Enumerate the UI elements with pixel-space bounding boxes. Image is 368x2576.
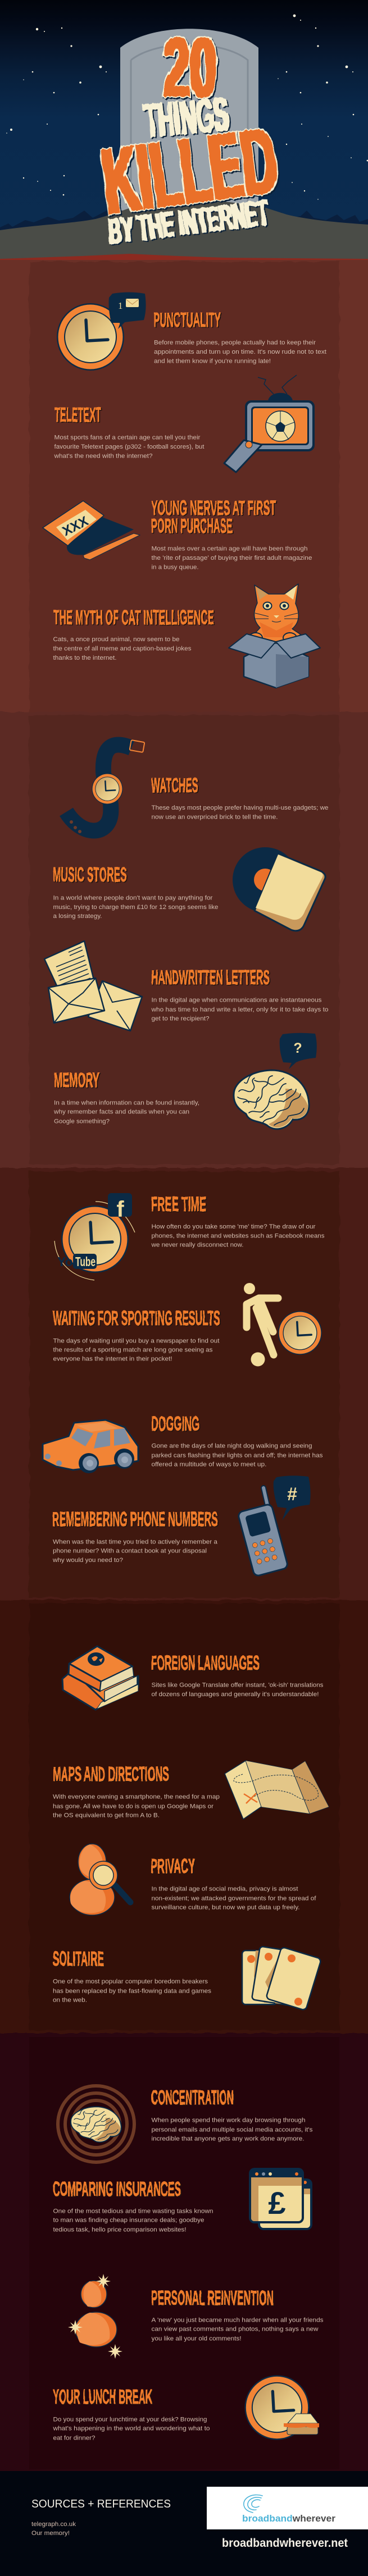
text block: why would you need to? (52, 1557, 123, 1564)
text block (152, 805, 328, 821)
icon: brain in concentric rings (58, 2086, 134, 2162)
text block: In the digital age of social media, privacy is almost (152, 1885, 298, 1892)
text block: Most males over a certain age will have been through (152, 546, 308, 552)
text block: now use an overpriced brick to tell the time. (152, 814, 278, 821)
text block: the centre of all meme and caption-based jokes (53, 646, 192, 652)
text block: has gone. All we have to do is open up Google Maps or (53, 1803, 213, 1810)
text block (152, 2117, 313, 2143)
stars (6, 15, 368, 200)
text block: sources: telegraph.co.uk (31, 2521, 76, 2528)
icon: folded map (225, 1761, 329, 1819)
panel: maps and directions (53, 1761, 329, 1819)
text block (53, 435, 205, 459)
icon: footballer and clock (244, 1283, 322, 1367)
text block: A 'new' you just became much harder when all your friends (152, 2317, 324, 2323)
panel: handwritten letters (44, 941, 328, 1031)
logo panel (207, 2487, 368, 2529)
section 5 background (0, 2033, 368, 2477)
text block: Sites like Google Translate offer instant, 'ok-ish' translations (152, 1682, 324, 1689)
heading (151, 496, 276, 537)
footer background (0, 2471, 368, 2576)
text block: the OS equivalent to get from A to B. (53, 1812, 160, 1819)
panel: cat intelligence (53, 584, 320, 688)
text block: to man was finding cheap insurance deals; goodbye (53, 2217, 205, 2223)
heading: MEMORY (54, 1068, 99, 1091)
title (97, 21, 283, 252)
website url: broadbandwherever.net (222, 2537, 348, 2550)
text block: what's happening in the world and wondering what to (52, 2426, 210, 2432)
icon: magazine: XXX (60, 514, 91, 539)
text block: In a world where people don't want to pay anything for (53, 895, 213, 902)
text block: Before mobile phones, people actually had to keep their (154, 339, 316, 346)
panel: personal reinvention (68, 2274, 324, 2359)
heading: PRIVACY (151, 1855, 195, 1878)
text block: The days of waiting until you buy a newspaper to find out (53, 1337, 219, 1344)
panel: sporting results (53, 1283, 322, 1367)
panel: dogging (43, 1412, 323, 1473)
panel: comparing insurances (53, 2168, 312, 2234)
text block: the 'rite of passage' of buying their first adult magazine (152, 555, 312, 561)
text block: In a time when information can be found instantly, (54, 1099, 199, 1106)
title: 20: 20 (163, 21, 216, 114)
text block: When was the last time you tried to actively remember a (53, 1538, 218, 1545)
heading: PORN PURCHASE (151, 514, 233, 537)
text block (151, 1223, 325, 1249)
text block: surveillance culture, but now we put data up freely. (152, 1904, 300, 1911)
text block: sources (31, 2521, 76, 2537)
text block (53, 1337, 219, 1362)
panel: music stores (53, 847, 325, 931)
icon: price comparison windows (249, 2168, 312, 2230)
background: night sky (0, 0, 368, 236)
text block (53, 1979, 212, 2003)
heading: FREE TIME (151, 1193, 206, 1216)
text block: sources: Our memory! (31, 2530, 70, 2537)
icon: mobile phone with hash bubble (238, 1476, 311, 1577)
icon: price comparison windows: £ (268, 2185, 286, 2221)
icon: vinyl record in sleeve (233, 847, 325, 931)
panel: foreign languages (62, 1646, 324, 1710)
text block: When people spend their work day browsing through (152, 2117, 306, 2123)
panel: punctuality (57, 292, 326, 371)
text block: personal emails and multiple social media accounts, it's (152, 2127, 313, 2134)
icon: letter and envelopes (44, 941, 142, 1031)
text block: non-existent; we attacked governments for the spread of (152, 1896, 317, 1902)
panel: watches: WATCHES (151, 774, 198, 797)
text block: favourite Teletext pages (p302 - football scores), but (54, 444, 205, 450)
text block (53, 1793, 220, 1819)
panel: lunch break (52, 2375, 319, 2441)
text block: eat for dinner? (53, 2435, 96, 2441)
section 3 background (0, 1168, 368, 1606)
icon: stack of books (62, 1646, 138, 1710)
text block (53, 2208, 213, 2234)
icon: magazine (43, 501, 140, 560)
text block: we never really disconnect now. (151, 1242, 244, 1249)
gravestone (120, 29, 258, 211)
panel: solitaire (53, 1946, 321, 2011)
text block: the results of a sporting match are long gone seeing as (53, 1346, 213, 1353)
icon: clock with sandwich (244, 2375, 319, 2440)
text block: a losing strategy. (53, 913, 102, 920)
panel: dogging: DOGGING (151, 1412, 199, 1435)
panel: concentration: CONCENTRATION (151, 2086, 234, 2109)
text block: In the digital age when communications are instantaneous (152, 997, 322, 1004)
text block (152, 2317, 324, 2342)
heading: sources and references: SOURCES + REFERENCES (31, 2498, 171, 2510)
text block (152, 1885, 317, 1911)
title: THINGS (142, 88, 231, 147)
icon: wristwatch (66, 740, 144, 833)
panel: lunch break: YOUR LUNCH BREAK (53, 2385, 152, 2408)
panel: phone numbers (52, 1476, 311, 1577)
panel: maps and directions: MAPS AND DIRECTIONS (53, 1762, 169, 1785)
text block: Most sports fans of a certain age can tell you their (54, 435, 201, 441)
text block (152, 1443, 323, 1468)
text block: These days most people prefer having multi-use gadgets; we (152, 805, 328, 811)
text block (53, 636, 192, 661)
icon: clock with facebook and youtube (54, 1193, 135, 1280)
text block (53, 895, 218, 920)
blood strip (0, 254, 368, 262)
text block: parked cars flashing their lights on and off; the internet has (152, 1452, 323, 1459)
panel: concentration (58, 2086, 313, 2162)
text block: and let them know if you're running late! (154, 358, 271, 365)
panel: footer (31, 2487, 368, 2550)
text block: How often do you take some 'me' time? The draw of our (152, 1223, 316, 1230)
text block: on the web. (53, 1997, 87, 2003)
panel: music stores: MUSIC STORES (53, 863, 127, 886)
text block: tedious task, hello price comparison websites! (53, 2227, 187, 2234)
panel: teletext: TELETEXT (54, 403, 101, 426)
icon: clock with facebook and youtube: f (116, 1197, 124, 1222)
text block: One of the most tedious and time wasting tasks known (53, 2208, 213, 2214)
text block (152, 1682, 324, 1698)
text block: Cats, a once proud animal, now seem to be (53, 636, 180, 643)
text block: everyone has the internet in their pocket! (53, 1355, 172, 1362)
text block: phones, the internet and websites such as Facebook means (152, 1233, 325, 1240)
panel: comparing insurances: COMPARING INSURANCES (53, 2177, 181, 2200)
text block (152, 546, 312, 570)
text block (52, 1538, 218, 1564)
text block: get to the recipient? (152, 1015, 209, 1022)
icon: cat in a box (229, 584, 320, 688)
section 1 background (0, 260, 368, 715)
text block (154, 339, 326, 365)
text block: has been replaced by the fast-flowing data and games (53, 1988, 212, 1994)
text block: thanks to the internet. (53, 655, 117, 661)
text block: can view past comments and photos, nothing says a new (152, 2326, 319, 2332)
panel: memory (53, 1033, 317, 1129)
icon: clock with facebook and youtube: Tube (75, 1254, 96, 1269)
text block: why remember facts and details when you can (53, 1108, 189, 1115)
icon: tv with remote (224, 375, 315, 472)
icon: playing cards (242, 1946, 321, 2011)
section 4 background (0, 1600, 368, 2038)
text block (151, 997, 328, 1022)
text block: offered a multitude of ways to meet up. (152, 1461, 266, 1468)
text block: Do you spend your lunchtime at your desk? Browsing (53, 2417, 207, 2423)
text block (53, 1099, 199, 1125)
icon: people with sparkles (68, 2274, 122, 2359)
logo panel: broadbandwherever (242, 2513, 335, 2524)
panel: teletext (53, 375, 315, 472)
section 2 background (0, 712, 368, 1172)
text block: of dozens of languages and generally it's understandable! (152, 1691, 319, 1698)
text block: you like all your old comments! (152, 2336, 242, 2342)
icon: brain with question bubble: ? (293, 1040, 302, 1056)
icon: brain with question bubble (234, 1033, 317, 1129)
text block: One of the most popular computer boredom breakers (53, 1979, 208, 1985)
icon: people under a magnifying glass (70, 1844, 130, 1915)
text block: Google something? (54, 1118, 110, 1125)
icon: clock with facebook and youtube: You (57, 1254, 81, 1269)
grass silhouette (0, 211, 368, 236)
text block: in a busy queue. (152, 564, 199, 570)
text block: what's the need with the internet? (53, 453, 153, 459)
icon: mobile phone with hash bubble: # (287, 1484, 297, 1504)
panel: free time (54, 1193, 325, 1280)
ground mound (0, 198, 368, 261)
icon: car (43, 1420, 138, 1473)
text block: phone number? With a contact book at your disposal (53, 1547, 207, 1554)
text block: incredible that anyone gets any work done anymore. (152, 2136, 305, 2143)
panel: privacy (70, 1844, 317, 1915)
text block: With everyone owning a smartphone, the need for a map (53, 1793, 220, 1800)
panel: solitaire: SOLITAIRE (53, 1947, 104, 1970)
icon: clock with message bubble: 1 (118, 300, 122, 311)
panel: punctuality: PUNCTUALITY (153, 308, 221, 331)
icon: clock with message bubble (57, 292, 146, 371)
text block (52, 2417, 210, 2441)
panel: young nerves (43, 496, 312, 570)
text block: music, trying to charge them £10 for 12 songs seems like (53, 904, 218, 911)
text block: who has time to hand write a letter, only for it to take days to (151, 1006, 328, 1013)
text block: Gone are the days of late night dog walking and seeing (152, 1443, 312, 1450)
panel: watches (66, 740, 328, 833)
text block: appointments and turn up on time. It's now rude not to text (154, 349, 326, 355)
